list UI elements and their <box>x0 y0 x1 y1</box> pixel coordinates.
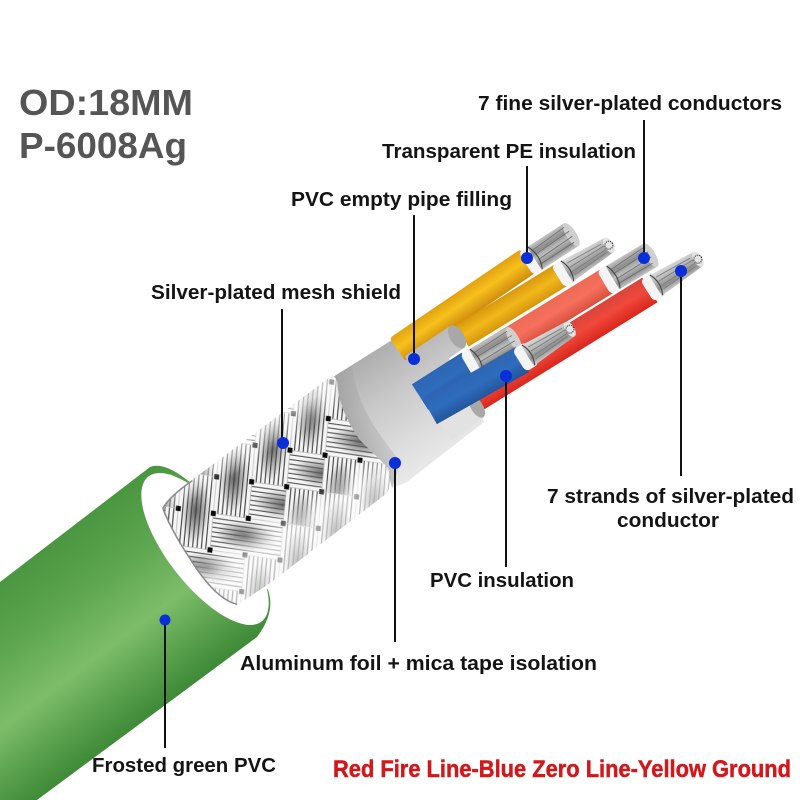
blue conductor front <box>423 348 529 424</box>
callout: 7 strands of silver-plated conductor: conductor <box>617 510 719 532</box>
yellow conductor rear <box>390 249 536 361</box>
callout: 7 fine silver-plated conductors: 7 fine silver-plated conductors <box>478 93 782 115</box>
callout: PVC insulation: PVC insulation <box>430 570 574 592</box>
callout: PVC empty pipe filling <box>291 189 512 365</box>
callout: Frosted green PVC <box>92 614 276 777</box>
callout: PVC insulation <box>430 370 574 592</box>
empty PVC pipe filler lower <box>440 394 488 440</box>
callout: Aluminum foil + mica tape isolation: Aluminum foil + mica tape isolation <box>240 653 597 675</box>
callout: Transparent PE insulation: Transparent PE insulation <box>382 141 636 163</box>
silver conductor tip 6 <box>512 316 581 372</box>
callout: Transparent PE insulation <box>382 141 636 264</box>
braided silver mesh shield <box>162 375 390 605</box>
heading: model number: P-6008Ag <box>19 125 187 166</box>
coral conductor <box>463 269 614 377</box>
silver conductor tip 5 <box>460 324 525 378</box>
silver conductor tip 4 <box>640 246 709 302</box>
callout: PVC empty pipe filling: PVC empty pipe filling <box>291 189 512 211</box>
callout: 7 strands of silver-plated conductor <box>547 265 794 532</box>
callout: Frosted green PVC: Frosted green PVC <box>92 755 276 777</box>
heading: outer diameter: OD:18MM <box>19 82 193 123</box>
callout: Silver-plated mesh shield: Silver-plated mesh shield <box>151 282 401 304</box>
blue conductor rear <box>412 353 478 410</box>
empty PVC pipe filler upper <box>405 322 470 382</box>
callout: Aluminum foil + mica tape isolation <box>240 457 597 675</box>
silver conductor tip 1 <box>518 220 583 276</box>
cable illustration <box>0 220 709 800</box>
callout: 7 strands of silver-plated conductor: 7 strands of silver-plated <box>547 486 794 508</box>
foil and mica tape layer <box>333 335 484 488</box>
callout: 7 fine silver-plated conductors <box>478 93 782 264</box>
green PVC jacket <box>0 454 291 800</box>
silver conductor tip 3 <box>597 241 662 295</box>
silver conductor tip 2 <box>551 232 620 288</box>
red conductor <box>467 278 658 410</box>
callout: Silver-plated mesh shield <box>151 282 401 449</box>
yellow conductor front <box>455 265 567 347</box>
